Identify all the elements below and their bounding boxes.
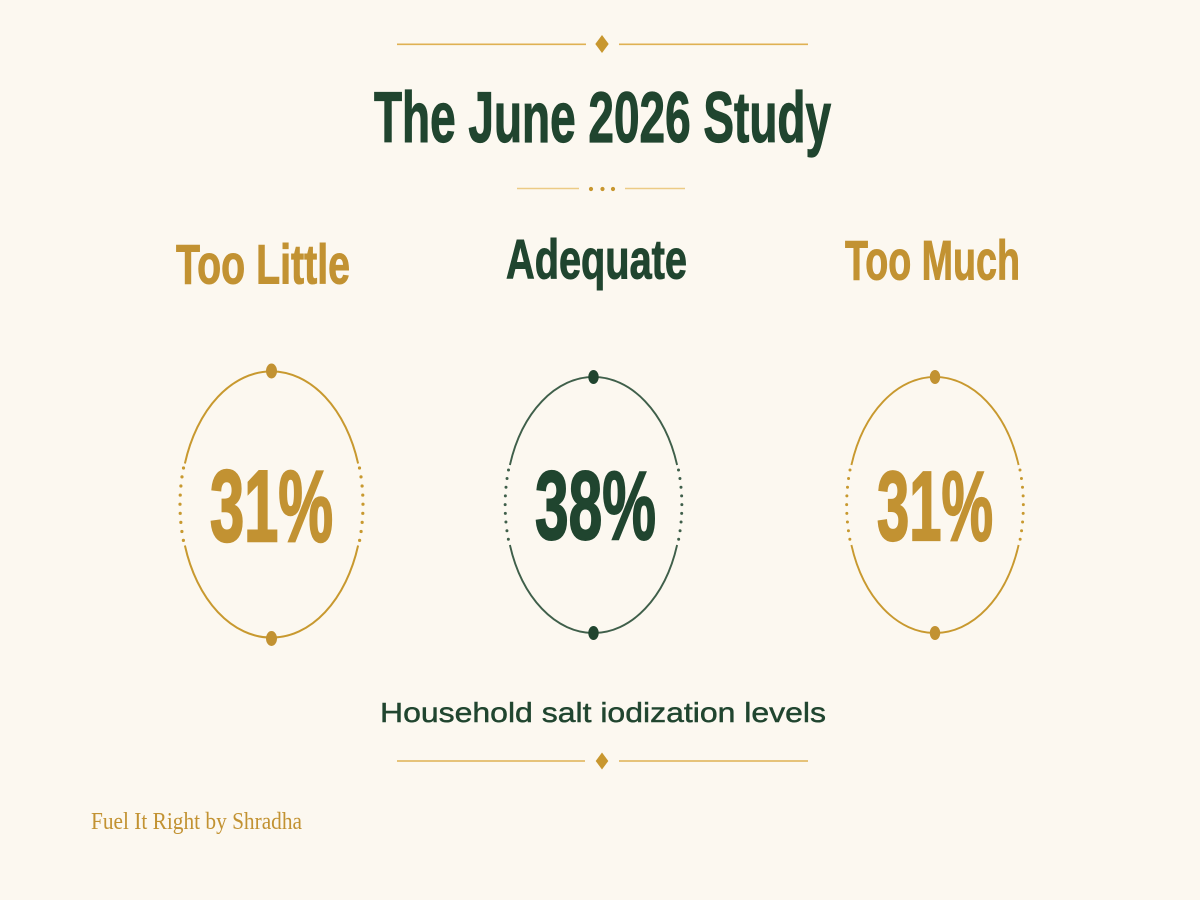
title: The June 2026 Study — [374, 79, 831, 158]
ring: adequate — [505, 370, 682, 640]
value: 38%: 38% — [535, 451, 656, 560]
panel: too much — [845, 228, 1023, 640]
ring: too little — [180, 364, 363, 646]
heading: adequate: Adequate — [506, 228, 687, 290]
heading: too much: Too Much — [845, 228, 1020, 292]
value: 31%: 31% — [210, 451, 333, 563]
top ornament divider — [397, 35, 808, 53]
heading: too little: Too Little — [176, 232, 350, 296]
footer credit: Fuel It Right by Shradha — [91, 809, 302, 835]
title sub-divider — [517, 187, 685, 191]
panel: too little — [176, 232, 363, 646]
panel: adequate — [505, 228, 687, 640]
value: 31%: 31% — [877, 451, 993, 561]
bottom ornament divider — [397, 752, 808, 770]
ring: too much — [847, 370, 1023, 640]
caption: Household salt iodization levels — [380, 697, 826, 728]
